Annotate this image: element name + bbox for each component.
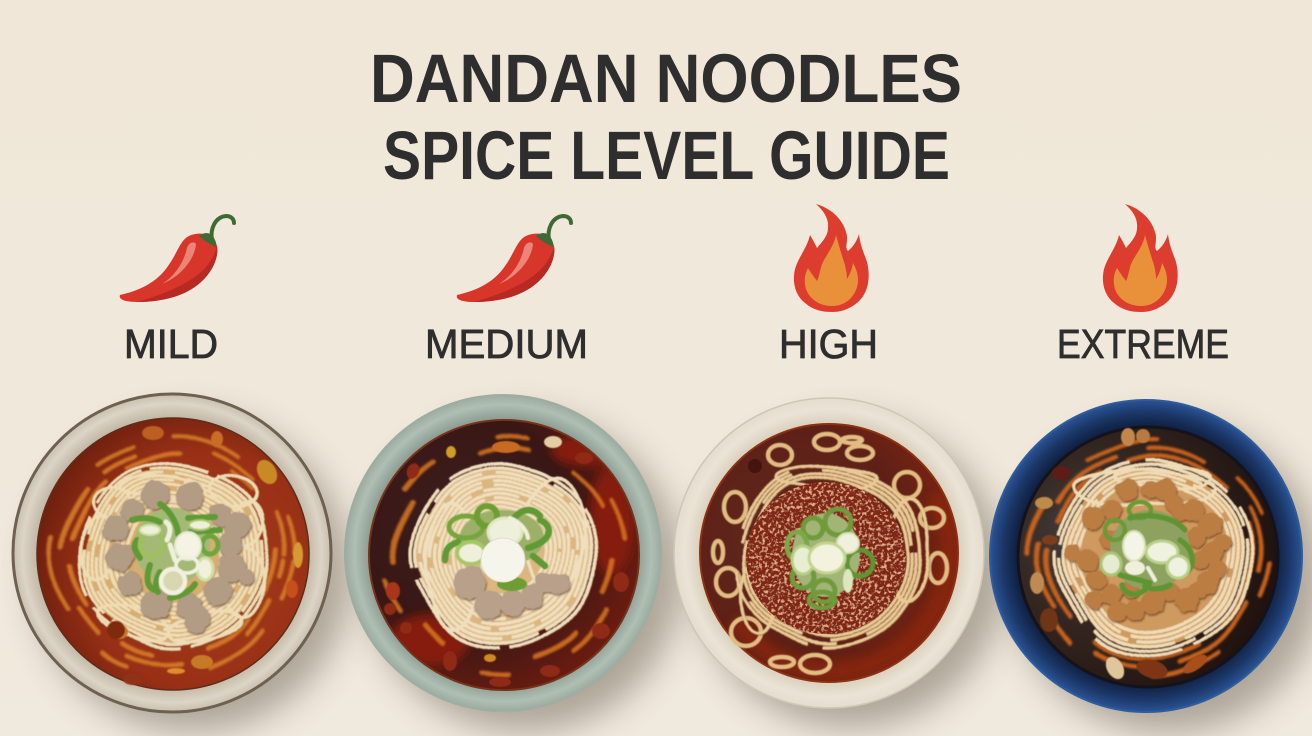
noodles under mound <box>736 464 928 648</box>
chili oil patches <box>390 434 634 666</box>
bowl shadow: high <box>696 420 1004 728</box>
floating noodle loops <box>713 434 947 673</box>
ceramic rim <box>345 395 661 711</box>
icon: chili pepper, mild <box>120 216 234 302</box>
broth <box>1018 427 1278 687</box>
pork chunks <box>454 567 568 619</box>
bowl: mild <box>13 394 331 712</box>
broth <box>700 424 958 682</box>
scallions <box>787 509 873 608</box>
label: high: HIGH <box>779 321 878 367</box>
chili oil rim <box>728 494 956 681</box>
noodle nest <box>1055 459 1251 655</box>
bowl: high <box>674 398 984 708</box>
bowl shadow: mild <box>34 416 350 732</box>
label: medium: MEDIUM <box>425 321 588 367</box>
bowl shadow: medium <box>366 416 682 732</box>
chili flakes and peanuts <box>107 426 303 685</box>
peanuts and chili pods <box>1030 428 1210 682</box>
pork chunks <box>103 481 254 632</box>
title <box>370 40 962 194</box>
icon: flame, extreme <box>1103 204 1178 312</box>
white onion slice <box>481 538 525 582</box>
ceramic rim <box>674 398 984 708</box>
chili oil droplet <box>748 459 762 473</box>
broth <box>369 420 639 690</box>
broth <box>37 418 309 690</box>
swirling chili oil noodles <box>1033 440 1267 674</box>
icon: chili pepper, medium <box>457 216 571 302</box>
ceramic rim <box>13 394 331 712</box>
icon: flame, high <box>794 204 869 312</box>
fried soybeans <box>1065 479 1231 622</box>
scallions <box>132 504 220 598</box>
swirling noodles in broth <box>55 437 291 673</box>
bowl: medium <box>345 395 661 711</box>
label: mild: MILD <box>124 321 218 367</box>
label: extreme: EXTREME <box>1057 321 1229 367</box>
chili flakes <box>384 436 629 687</box>
scallions <box>1101 502 1192 594</box>
bowl shadow: extreme <box>1011 421 1312 733</box>
noodle nest <box>411 463 595 647</box>
chili flake mound <box>746 482 906 634</box>
noodle nest <box>79 461 267 650</box>
bowl: extreme <box>990 400 1302 712</box>
swirling orange oil <box>386 437 622 673</box>
navy ceramic rim <box>990 400 1302 712</box>
title line 2: SPICE LEVEL GUIDE <box>383 117 950 194</box>
title line 1: DANDAN NOODLES <box>370 40 962 117</box>
scallions <box>445 506 549 591</box>
